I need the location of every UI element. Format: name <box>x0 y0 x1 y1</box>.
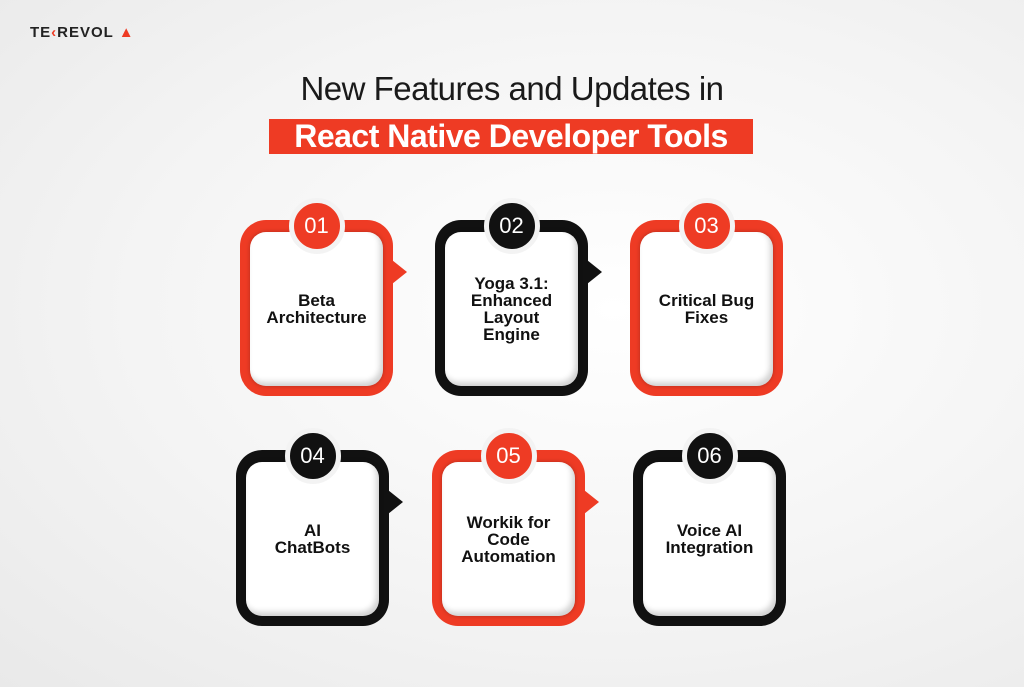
card 03: Critical Bug <box>659 291 754 310</box>
card 01: Beta <box>298 291 335 310</box>
card 06: Integration <box>666 538 753 557</box>
card 02 <box>435 203 602 396</box>
card 02: Yoga 3.1: <box>474 274 549 293</box>
card 06: 06 <box>697 443 722 468</box>
card 01 <box>240 203 407 396</box>
card 04 <box>236 433 403 626</box>
card 02: 02 <box>499 213 524 238</box>
card 06: Voice AI <box>677 521 742 540</box>
card 06 <box>633 433 786 626</box>
title banner: React Native Developer Tools <box>294 118 728 154</box>
card 03: 03 <box>694 213 719 238</box>
card 03 <box>630 203 783 396</box>
card 05: 05 <box>496 443 521 468</box>
card 05: Code <box>487 530 530 548</box>
card 04: 04 <box>300 443 325 468</box>
logo: TE‹REVOL ▲ <box>30 24 135 41</box>
card 03: Fixes <box>685 308 728 327</box>
card 05: Automation <box>461 546 556 566</box>
card 01: Architecture <box>266 308 367 327</box>
card 02: Engine <box>483 325 540 344</box>
card 02: Layout <box>484 308 539 327</box>
card 02: Enhanced <box>471 291 552 310</box>
card 05: Workik for <box>467 512 550 532</box>
card 05 <box>432 433 599 626</box>
card 04: AI <box>304 521 321 540</box>
title: New Features and Updates in <box>300 70 724 107</box>
card 01: 01 <box>304 213 329 238</box>
card 04: ChatBots <box>275 538 350 557</box>
